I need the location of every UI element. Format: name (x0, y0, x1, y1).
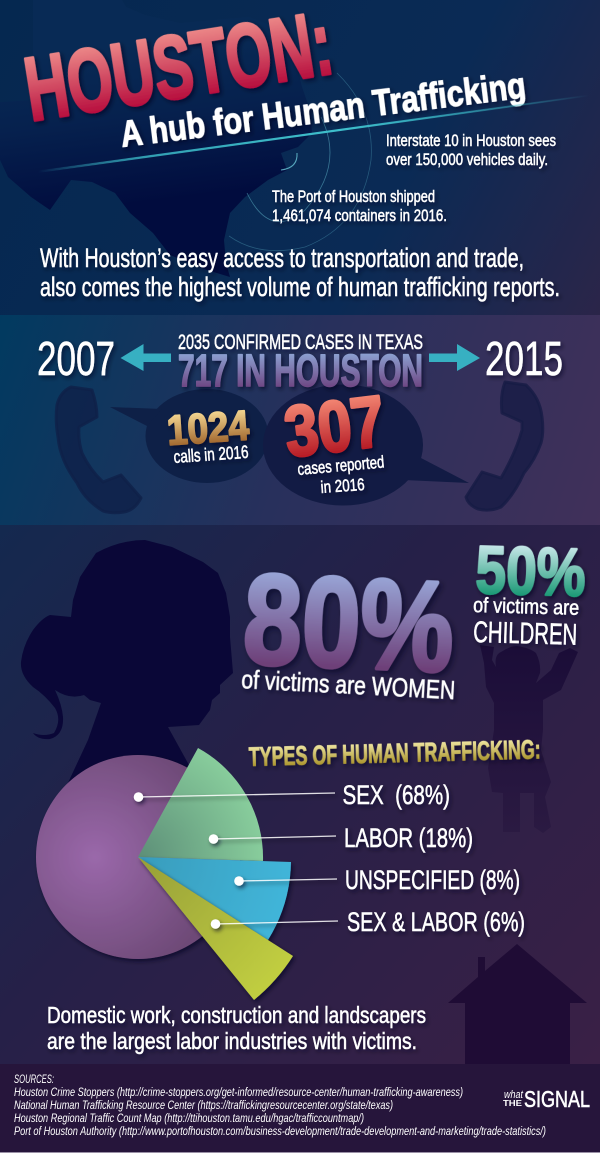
text: of victims are children (473, 594, 579, 652)
text: of victims are children: of victims are (473, 594, 579, 620)
divider: teal title line (38, 95, 589, 172)
icon: Texas map silhouette (0, 0, 312, 277)
stat: 307 cases (280, 381, 389, 497)
text block: sources: National Human Trafficking Resource Center (https://traffickingresourcecenter.org/state/texas) (14, 1098, 393, 1112)
text block: interstate fact (386, 131, 556, 169)
stat: 1024 calls: 1024 (165, 401, 251, 454)
slice: sex 68% (36, 755, 240, 959)
text block: interstate fact: over 150,000 vehicles daily. (386, 150, 548, 169)
stat: 80 percent: 80% (241, 548, 456, 699)
logo: What the Signal (503, 1086, 590, 1112)
legend labels: LABOR (18%) (344, 823, 473, 853)
logo: What the Signal: what (504, 1089, 524, 1101)
legend labels: UNSPECIFIED (8%) (345, 865, 520, 895)
panel: header background (0, 0, 600, 315)
panel: phone statistics background (0, 315, 600, 525)
icon: port radius arcs (229, 73, 371, 251)
text block: sources: SOURCES: (14, 1072, 54, 1086)
arrow: pointing right (429, 344, 480, 371)
panel: victims background (0, 525, 600, 1064)
stat: 2007: 2007 (37, 333, 115, 386)
text: of victims are women: of victims are WOMEN (241, 664, 456, 705)
stat: 717 in Houston: 717 IN HOUSTON (178, 345, 423, 396)
legend labels: SEX & LABOR (6%) (347, 907, 525, 937)
logo: What the Signal: THE (503, 1099, 523, 1108)
legend labels: SEX (68%) (342, 780, 450, 810)
pie chart (36, 748, 293, 1000)
text block: sources (14, 1072, 546, 1138)
callout: cases speech bubble (263, 384, 469, 506)
legend labels (342, 780, 525, 937)
arrow: pointing left (120, 344, 171, 371)
text block: sources: Houston Crime Stoppers (http://crime-stoppers.org/get-informed/resource-center/human-trafficking-awareness) (14, 1085, 463, 1099)
stat: 2015: 2015 (485, 333, 563, 386)
icon: house silhouette (448, 944, 587, 1064)
text block: labor industries: Domestic work, construction and landscapers (47, 1002, 426, 1028)
stat: 1024 calls: calls in 2016 (173, 442, 249, 467)
icon: child silhouette (480, 645, 578, 833)
text block: port fact: 1,461,074 containers in 2016. (272, 206, 447, 225)
slice: labor 18% (138, 748, 263, 861)
text block: port fact: The Port of Houston shipped (272, 187, 435, 206)
heading: confirmed cases in Texas: 2035 CONFIRMED CASES IN TEXAS (178, 331, 423, 354)
stat: 307 cases: in 2016 (320, 475, 365, 497)
legend leader lines (134, 792, 338, 929)
text block: labor industries (47, 1002, 426, 1054)
slice: sex and labor 6% (138, 857, 293, 1000)
text block: port fact (272, 187, 447, 225)
icon: woman silhouette (21, 540, 233, 800)
icon: right telephone (466, 382, 543, 510)
panel: sources footer background (0, 1064, 600, 1153)
slice: unspecified 8% (138, 857, 291, 940)
stat: 307 cases: 307 (280, 381, 389, 473)
stat: 307 cases: cases reported (297, 452, 385, 479)
text block: labor industries: are the largest labor industries with victims. (47, 1028, 417, 1054)
callout: calls speech bubble (110, 389, 268, 483)
text block: sources: Houston Regional Traffic Count Map (http://ttihouston.tamu.edu/hgac/trafficcountmap/) (14, 1111, 364, 1125)
text block: access statement (40, 243, 560, 302)
icon: left telephone (56, 387, 141, 513)
decorative base line (0, 1152, 600, 1153)
